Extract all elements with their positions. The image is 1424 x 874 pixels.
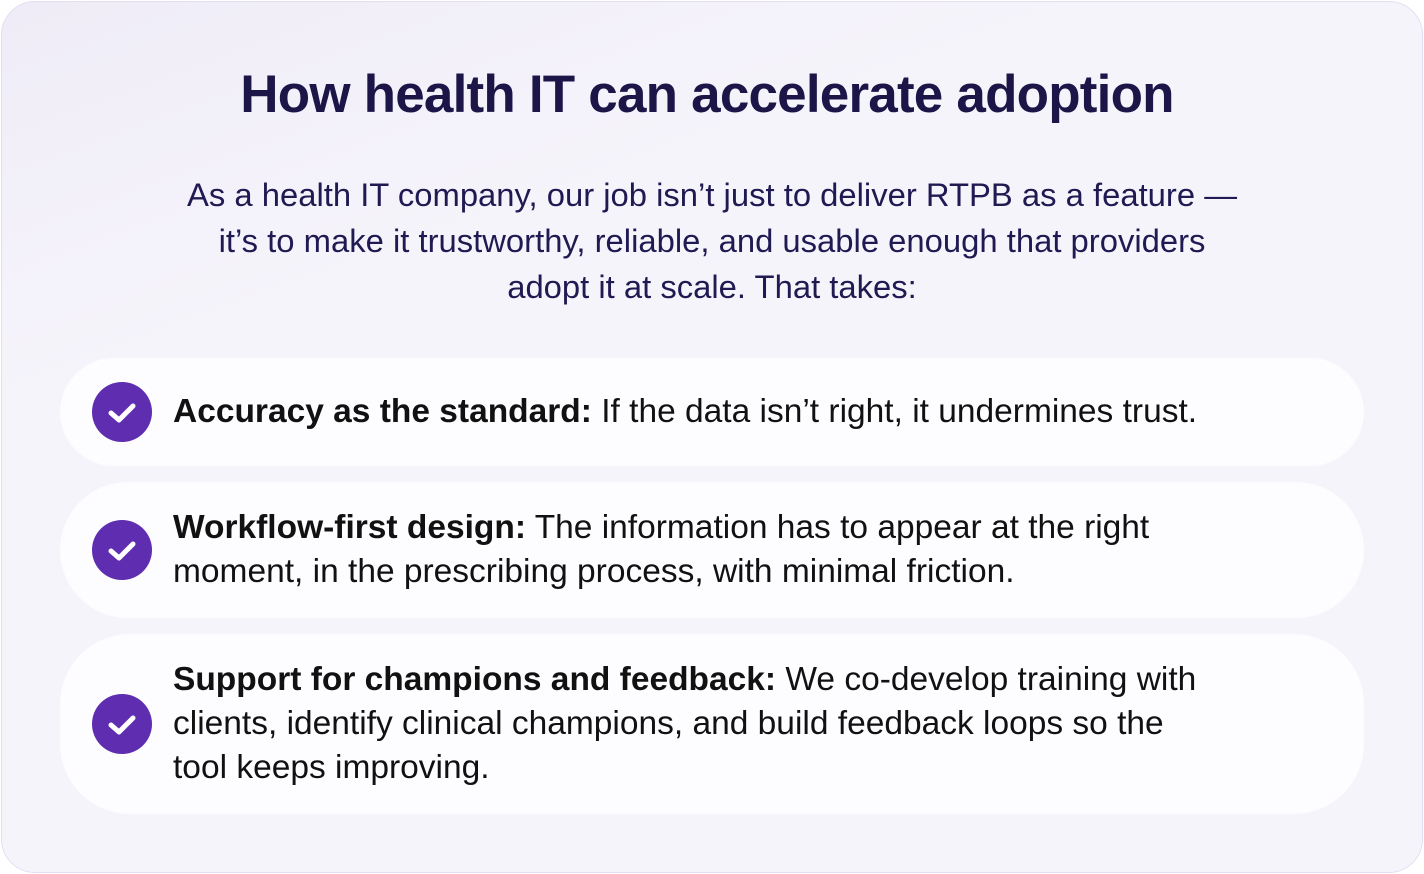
intro text: As a health IT company, our job isn’t just to deliver RTPB as a feature — xyxy=(187,176,1237,213)
intro text: adopt it at scale. That takes: xyxy=(507,268,917,305)
text: workflow xyxy=(173,509,1149,590)
icon: check xyxy=(92,520,152,580)
text: workflow: Workflow-first design: The information has to appear at the right xyxy=(173,509,1149,546)
text: champions: tool keeps improving. xyxy=(173,749,490,786)
intro text: it’s to make it trustworthy, reliable, and usable enough that providers xyxy=(219,222,1205,259)
text: champions: clients, identify clinical champions, and build feedback loops so the xyxy=(173,705,1164,742)
title: How health IT can accelerate adoption xyxy=(240,65,1174,124)
card: champions xyxy=(60,634,1364,814)
intro text xyxy=(187,176,1238,305)
text: accuracy: Accuracy as the standard: If the data isn’t right, it undermines trust. xyxy=(173,393,1197,430)
icon: check xyxy=(92,694,152,754)
text: workflow: moment, in the prescribing process, with minimal friction. xyxy=(173,553,1015,590)
icon: check xyxy=(92,382,152,442)
text: champions: Support for champions and feedback: We co-develop training with xyxy=(173,661,1196,698)
card: workflow xyxy=(60,482,1364,618)
text: champions xyxy=(173,661,1196,786)
card: accuracy xyxy=(60,358,1364,466)
